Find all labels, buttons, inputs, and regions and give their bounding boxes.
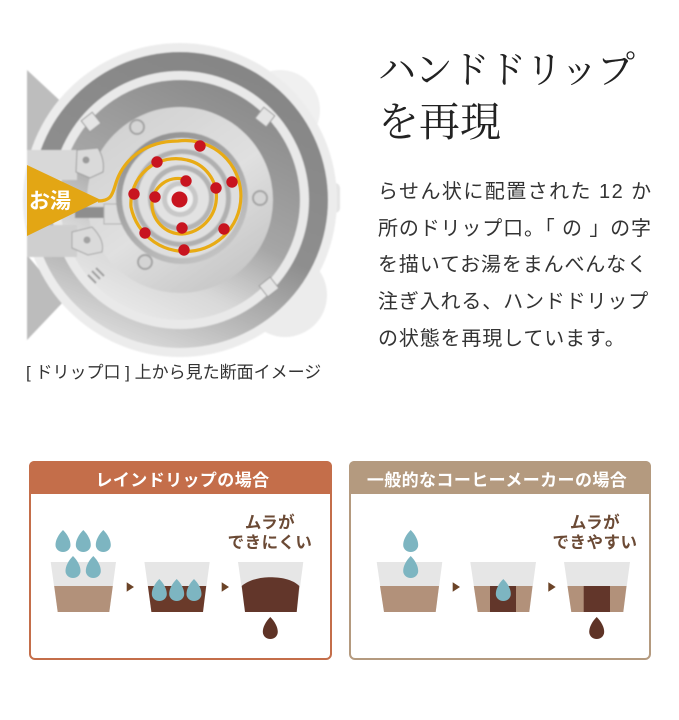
icon: red drip ports — [128, 140, 238, 256]
result label: できにくい — [228, 533, 312, 552]
result label — [228, 512, 312, 552]
panel frame — [30, 462, 331, 659]
arrow — [222, 582, 229, 592]
arrow — [453, 582, 460, 592]
panel header — [349, 461, 651, 494]
result label: できやすい — [552, 533, 638, 552]
panel header: 一般的なコーヒーメーカーの場合 — [367, 471, 627, 490]
result label — [552, 512, 638, 552]
cup: step 3 — [238, 562, 303, 639]
title: ハンドドリップ — [378, 50, 635, 92]
caption: [ ドリップ口 ] 上から見た断面イメージ — [26, 363, 321, 382]
callout: hot water wedge: お湯 — [29, 190, 71, 213]
panel header — [29, 461, 332, 494]
body text — [378, 180, 652, 350]
product image: drip port cross-section — [23, 43, 340, 357]
panel: rain drip — [29, 461, 332, 659]
body text: を描いてお湯をまんべんなく — [378, 253, 648, 276]
panel frame — [350, 462, 650, 659]
panel header: レインドリップの場合 — [96, 471, 270, 490]
arrow — [548, 582, 556, 592]
cup: step 1 — [377, 530, 442, 612]
body text: 所のドリップ口。「 の 」の字 — [378, 217, 652, 240]
body text: 注ぎ入れる、ハンドドリップ — [378, 290, 649, 313]
panel: typical coffee maker — [349, 461, 651, 659]
cup: step 2 — [470, 562, 536, 612]
body text: らせん状に配置された 12 か — [378, 180, 652, 203]
result label: ムラが — [245, 512, 295, 532]
title — [378, 50, 635, 145]
cup: step 3 — [564, 562, 630, 639]
callout: hot water wedge — [27, 165, 101, 236]
cup: step 2 — [144, 562, 210, 612]
result label: ムラが — [570, 512, 620, 532]
icon: hot water spiral path — [98, 141, 241, 252]
arrow — [127, 582, 134, 592]
title: を再現 — [378, 99, 501, 145]
cup: step 1 — [51, 530, 116, 612]
body text: の状態を再現しています。 — [378, 327, 626, 350]
